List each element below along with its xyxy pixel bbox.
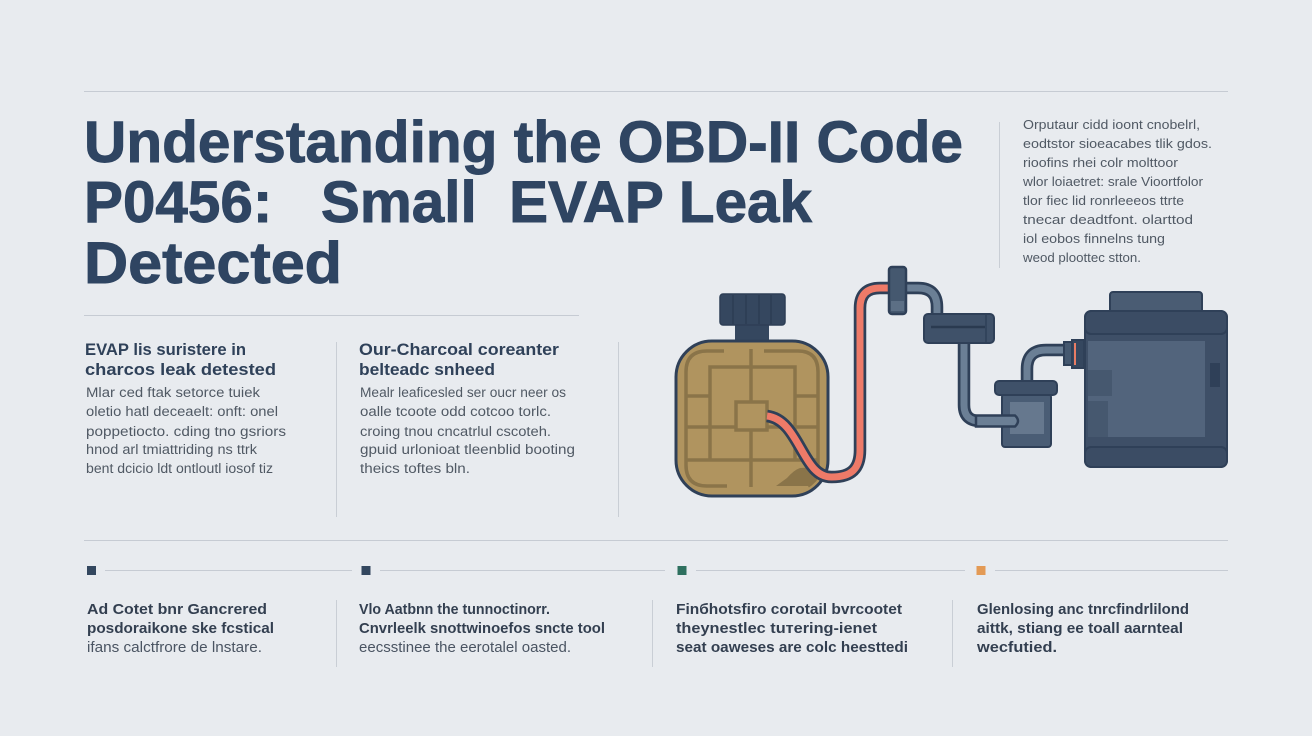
text block: charcoal column body: gpuid urlonioat tleenblid booting <box>360 442 575 457</box>
text block: step 4: wecfutied. <box>976 639 1057 656</box>
icon: vent filter <box>976 381 1057 447</box>
heading: charcoal column <box>359 340 559 379</box>
text block: charcoal column body <box>360 385 575 476</box>
text block: charcoal column body: Mealr leaficesled ser oucr neer os <box>360 385 566 400</box>
text block: charcoal column body: theics toftes bln. <box>360 461 470 476</box>
title: Understanding the OBD-II Code <box>84 110 963 175</box>
heading: EVAP column: EVAP lis suristere in <box>85 340 246 359</box>
heading: EVAP column: charcos leak detested <box>85 360 276 379</box>
text block: top right intro <box>1022 117 1212 265</box>
icon: charcoal canister <box>676 294 828 496</box>
title: Detected <box>84 231 342 296</box>
pipe: grey line to valve <box>905 288 937 316</box>
pipe: valve to filter <box>964 340 1017 421</box>
icon: purge valve <box>924 314 994 343</box>
text block: step 4 <box>976 601 1189 656</box>
text block: top right intro: tnecar deadtfont. olarttod <box>1023 212 1193 227</box>
timeline: step 2 marker <box>362 566 665 575</box>
text block: top right intro: iol eobos finnelns tung <box>1023 231 1165 246</box>
text block: top right intro: eodtstor sioeacabes tlik gdos. <box>1023 136 1212 151</box>
timeline: step 3 marker <box>678 566 965 575</box>
diagram: EVAP system <box>676 267 1227 496</box>
panel: EVAP column <box>85 340 286 476</box>
heading: EVAP column <box>85 340 276 379</box>
title <box>84 110 963 296</box>
text block: EVAP column body: oletio hatl deceaelt: onft: onel <box>86 404 278 419</box>
panel: charcoal column <box>359 340 575 476</box>
icon: coupling <box>889 267 906 314</box>
text block: step 1: posdoraikone ske fcstical <box>87 620 274 637</box>
text block: top right intro: tlor fiec lid ronrleeeos ttrte <box>1023 193 1184 208</box>
text block: top right intro: wlor loiaetret: srale Vioortfolor <box>1022 174 1204 189</box>
text block: EVAP column body <box>86 385 286 476</box>
text block: step 1: ifans calctfrore de lnstare. <box>87 639 262 656</box>
icon: fuel tank <box>1064 292 1227 467</box>
text block: step 1: Ad Cotet bnr Gancrered <box>87 601 267 618</box>
hose: salmon vacuum line <box>767 288 890 477</box>
text block: step 3 <box>676 601 908 656</box>
text block: step 3: theynestlec tuтering-ienet <box>676 620 877 637</box>
text block: step 2: Cnvrleelk snottwinoefos sncte tool <box>359 620 605 637</box>
text block: EVAP column body: hnod arl tmiattriding ns ttrk <box>86 442 257 457</box>
text block: charcoal column body: croing tnou cncatrlul csсoteh. <box>360 424 551 439</box>
text block: EVAP column body: poppetiocto. cding tno gsriors <box>86 424 286 439</box>
text block: top right intro: Orputaur cidd ioont cnobelrl, <box>1023 117 1200 132</box>
timeline: step 4 marker <box>976 566 1228 575</box>
text block: top right intro: rioofins rhei colr molttoor <box>1023 155 1179 170</box>
timeline: step 1 marker <box>87 566 352 575</box>
text block: step 4: aittk, stiang ee toall aarnteal <box>977 620 1183 637</box>
text block: step 1 <box>87 601 274 656</box>
text block: step 4: Glenlosing anc tnrcfindrlilond <box>977 601 1189 618</box>
text block: step 2: Vlo Aatbnn the tunnoctinorr. <box>359 601 550 618</box>
text block: step 2 <box>359 601 605 656</box>
heading: charcoal column: Our-Charcoal coreanter <box>359 340 559 359</box>
text block: charcoal column body: oalle tcoote odd cotcoo torlc. <box>360 404 551 419</box>
pipe: filter to tank <box>1027 350 1066 382</box>
text block: EVAP column body: bent dcicio ldt ontloutl iosof tiz <box>86 461 273 476</box>
text block: top right intro: wеod рlооttес stton. <box>1022 250 1141 265</box>
heading: charcoal column: belteadc snheed <box>359 360 495 379</box>
text block: step 3: Finбhotsfiro coгotail bvrcootet <box>676 601 902 618</box>
title: P0456: Small EVAP Leak <box>84 170 813 235</box>
text block: EVAP column body: Mlar ced ftak setorce tuiek <box>86 385 260 400</box>
text block: step 3: seat oaweses are colc heesttedi <box>676 639 908 656</box>
text block: step 2: eecsstinee the eerotalel oasted. <box>359 639 571 656</box>
